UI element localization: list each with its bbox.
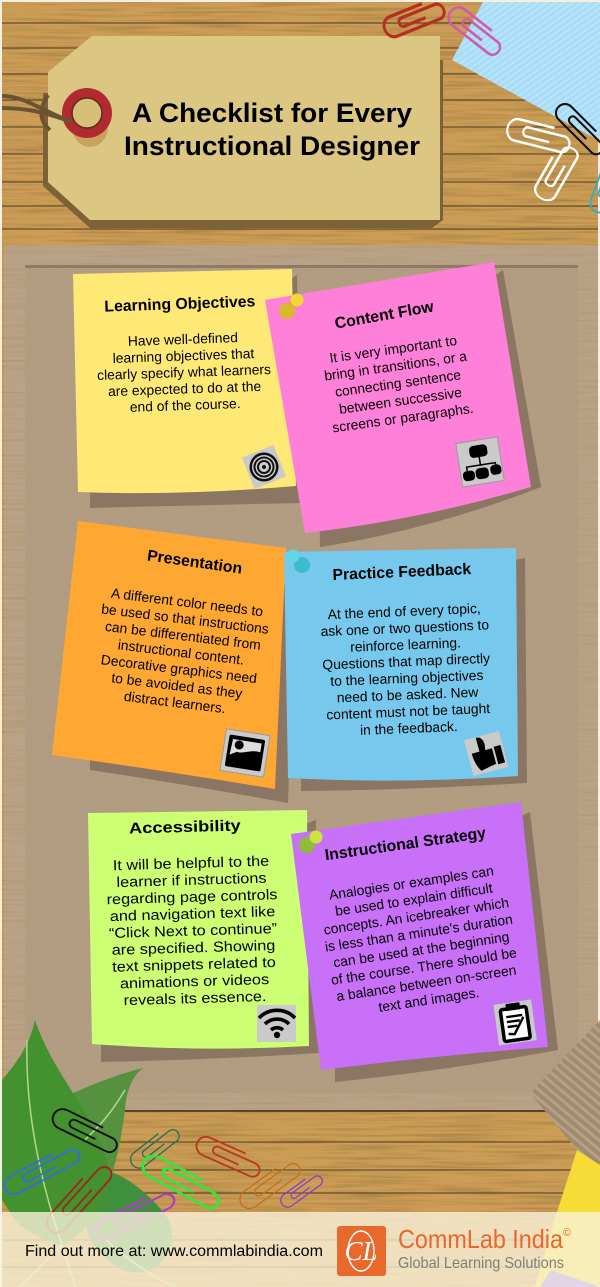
body text: reveals its essence. — [123, 989, 267, 1009]
heading: Instructional Strategy — [324, 825, 487, 864]
body text: between successive — [338, 384, 463, 417]
body text: are specified. Showing — [111, 938, 276, 959]
body text: can be used at the beginning — [332, 928, 510, 970]
body text: be used so that instructions — [100, 600, 270, 637]
heading: Presentation — [146, 547, 243, 578]
body text: Decorative graphics need — [100, 651, 258, 686]
body text: At the end of every topic, — [327, 600, 481, 622]
icon: blue push pin — [286, 550, 310, 573]
body text: and navigation text like — [110, 904, 275, 925]
tag hole with ring — [62, 88, 112, 147]
body text — [96, 328, 272, 416]
body text: of the course. There should be — [330, 944, 518, 988]
body text — [316, 861, 524, 1021]
body text: Have well-defined — [128, 329, 238, 349]
body text: “Click Next to continue” — [109, 921, 277, 942]
brand name: Global Learning Solutions — [398, 1255, 564, 1272]
body text: is less than a minute's duration — [324, 911, 514, 955]
heading: Practice Feedback — [332, 561, 472, 584]
title tag — [2, 36, 443, 228]
note shadows — [90, 270, 558, 1082]
panel: presentation — [52, 521, 286, 789]
icon: thumbs up — [464, 731, 508, 776]
body text: Analogies or examples can — [328, 862, 495, 903]
body text: are expected to do at the — [108, 378, 262, 399]
find out more text: Find out more at: www.commlabindia.com — [25, 1243, 323, 1260]
brand name: © — [563, 1227, 571, 1239]
footer band — [0, 1212, 600, 1287]
icon: green push pin — [299, 830, 322, 853]
body text: end of the course. — [129, 395, 241, 415]
title text: Instructional Designer — [124, 131, 421, 161]
body text: reinforce learning. — [350, 634, 461, 655]
heading: Learning Objectives — [104, 293, 256, 316]
body text: A different color needs to — [110, 585, 264, 619]
body text: in the feedback. — [360, 718, 458, 738]
body text: can be differentiated from — [104, 618, 262, 653]
body text: regarding page controls — [106, 887, 278, 908]
body text: learner if instructions — [116, 870, 267, 891]
body text: text and images. — [377, 984, 480, 1015]
body text: content must not be taught — [326, 700, 491, 723]
body text: text snippets related to — [112, 955, 276, 975]
body text: instructional content. — [117, 636, 245, 668]
paperclips bottom — [1, 1106, 324, 1243]
title text: A Checklist for Every — [132, 98, 412, 128]
body text: be used to explain difficult — [334, 880, 494, 919]
body text — [90, 584, 272, 720]
heading: Accessibility — [129, 817, 242, 837]
icon: target — [242, 445, 286, 489]
logo — [337, 1226, 386, 1276]
body text: clearly specify what learners — [97, 361, 271, 383]
body text: It will be helpful to the — [113, 853, 269, 874]
paperclips top right — [381, 0, 600, 215]
body text — [321, 331, 475, 436]
brand name: CommLab India — [398, 1224, 563, 1254]
body text: distract learners. — [123, 688, 227, 716]
body text: concepts. An icebreaker which — [323, 894, 510, 938]
body text: to be avoided as they — [111, 669, 243, 701]
icon: picture — [220, 729, 270, 777]
icon: network — [456, 437, 504, 487]
body text: bring in transitions, or a — [323, 348, 468, 384]
body text: learning objectives that — [112, 345, 255, 366]
icon: clipboard — [493, 1000, 537, 1045]
blue paper — [452, 2, 600, 141]
yellow paper — [535, 1150, 600, 1287]
icon: yellow push pin — [279, 294, 304, 319]
panel: content flow — [265, 262, 531, 533]
body text — [320, 600, 494, 739]
body text: connecting sentence — [334, 366, 462, 400]
panel: instructional strategy — [291, 802, 548, 1070]
brand name — [398, 1224, 571, 1272]
body text: a balance between on-screen — [335, 961, 517, 1004]
panel: accessibility — [88, 810, 309, 1049]
body text: Questions that map directly — [322, 650, 490, 673]
title text — [124, 98, 421, 161]
body text: animations or videos — [120, 972, 270, 992]
body text: to the learning objectives — [330, 667, 484, 689]
tag string — [2, 95, 72, 130]
icon: wifi — [257, 1005, 296, 1042]
corrugated cardboard — [530, 1020, 600, 1165]
body text: need to be asked. New — [336, 684, 480, 705]
cork board — [4, 245, 598, 1112]
body text: screens or paragraphs. — [331, 400, 474, 435]
logo: CL — [344, 1236, 378, 1266]
heading: Content Flow — [333, 298, 436, 333]
panel: practice feedback — [284, 548, 518, 781]
body text — [105, 853, 281, 1009]
panel: learning objectives — [73, 269, 296, 493]
body text: It is very important to — [328, 332, 458, 366]
leaves — [2, 1020, 175, 1287]
body text: ask one or two questions to — [320, 616, 490, 639]
